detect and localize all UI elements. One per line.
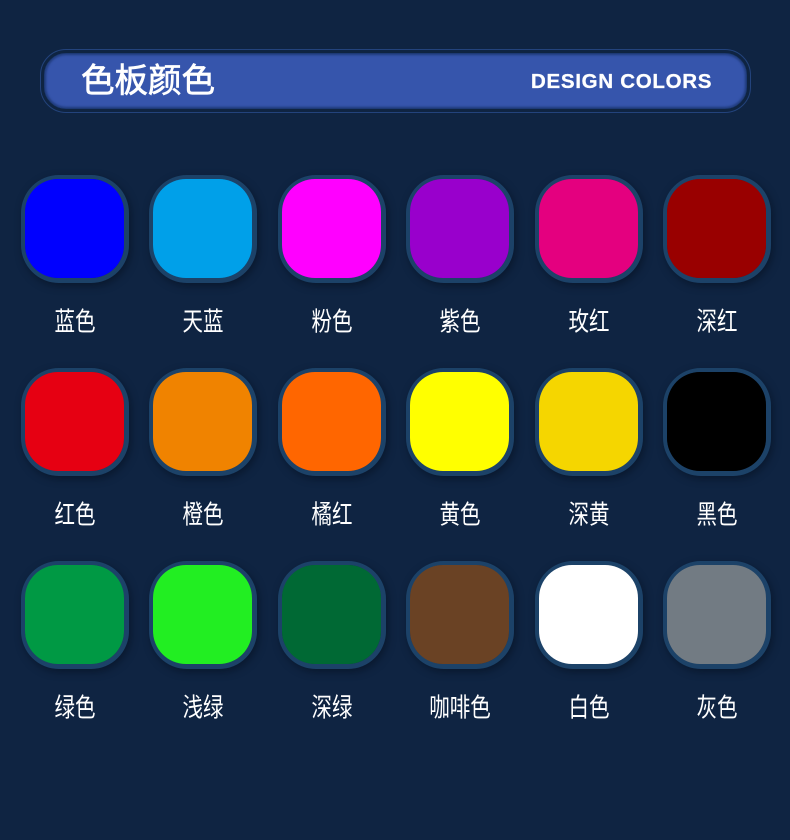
swatch: orange	[149, 368, 257, 476]
swatch: white	[535, 561, 643, 669]
title banner	[40, 49, 751, 113]
swatch: yellow	[406, 368, 514, 476]
swatch: light green	[149, 561, 257, 669]
swatch: orange red	[278, 368, 386, 476]
banner bar	[44, 53, 747, 109]
swatch: red	[21, 368, 129, 476]
label: dark green: 深绿	[312, 694, 352, 723]
title: English subheading: DESIGN COLORS	[531, 70, 712, 93]
title: Chinese heading: 色板颜色	[81, 63, 215, 100]
label: orange red: 橘红	[312, 501, 352, 530]
swatch: pink	[278, 175, 386, 283]
swatch: dark red	[663, 175, 771, 283]
label: blue: 蓝色	[54, 308, 96, 337]
swatch: black	[663, 368, 771, 476]
label: gray: 灰色	[696, 694, 738, 723]
label: light green: 浅绿	[182, 694, 224, 723]
label: rose red: 玫红	[568, 308, 610, 337]
swatch: rose red	[535, 175, 643, 283]
label: pink: 粉色	[312, 308, 352, 337]
label: deep yellow: 深黄	[568, 501, 610, 530]
swatch: sky blue	[149, 175, 257, 283]
label: green: 绿色	[54, 694, 96, 723]
label: red: 红色	[54, 501, 96, 530]
label: dark red: 深红	[696, 308, 738, 337]
swatch: gray	[663, 561, 771, 669]
label: purple: 紫色	[440, 308, 480, 337]
label: coffee: 咖啡色	[429, 694, 491, 723]
label: yellow: 黄色	[440, 501, 480, 530]
label: sky blue: 天蓝	[182, 308, 224, 337]
label: orange: 橙色	[182, 501, 224, 530]
label: black: 黑色	[696, 501, 738, 530]
label: white: 白色	[568, 694, 610, 723]
swatch: purple	[406, 175, 514, 283]
swatch: dark green	[278, 561, 386, 669]
swatch: deep yellow	[535, 368, 643, 476]
swatch: green	[21, 561, 129, 669]
swatch: coffee	[406, 561, 514, 669]
swatch: blue	[21, 175, 129, 283]
